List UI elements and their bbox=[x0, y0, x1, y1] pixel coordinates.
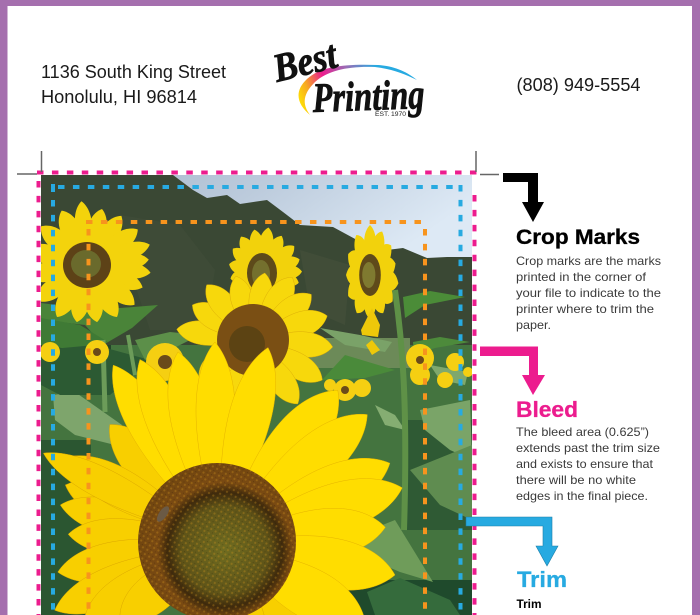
large sunflower disc bbox=[138, 463, 296, 615]
sunflower middle bbox=[175, 271, 334, 411]
stem left bbox=[103, 340, 105, 412]
bleed description: extends past the trim size bbox=[516, 441, 660, 455]
crop marks description: Crop marks are the marks bbox=[516, 254, 661, 268]
bleed line: pink dashed border bbox=[37, 172, 477, 615]
sky bbox=[173, 175, 472, 258]
address bbox=[41, 62, 226, 107]
large sunflower seed texture bbox=[138, 463, 296, 615]
large sunflower front petals bbox=[96, 342, 409, 615]
logo: Best Printing bbox=[267, 31, 425, 122]
leaves bbox=[41, 291, 472, 615]
safe area: orange dashed border bbox=[86, 222, 428, 615]
bleed description: The bleed area (0.625”) bbox=[516, 425, 649, 439]
trim subheading: Trim bbox=[516, 597, 542, 611]
stem right bbox=[395, 290, 405, 530]
arrow: crop marks bbox=[503, 173, 544, 222]
logo word Printing: Printing bbox=[311, 72, 425, 122]
bleed description: and exists to ensure that bbox=[516, 457, 654, 471]
bleed heading: Bleed bbox=[516, 397, 578, 422]
arrow: trim bbox=[466, 517, 558, 566]
arrow: bleed bbox=[480, 346, 545, 395]
sunflower top centre bbox=[229, 228, 302, 290]
sunflower top left bbox=[41, 201, 150, 322]
sunflower top right bbox=[345, 225, 399, 319]
logo swoosh bbox=[299, 65, 417, 115]
mountain bbox=[41, 175, 472, 345]
sunflower photo bbox=[24, 175, 473, 615]
bee bbox=[156, 506, 170, 522]
crop marks bbox=[17, 151, 499, 174]
trim heading: Trim bbox=[517, 567, 567, 592]
bleed description bbox=[516, 425, 660, 503]
foreground foliage base bbox=[41, 345, 472, 615]
address: 1136 South King Street bbox=[41, 62, 226, 82]
crop marks description: printed in the corner of bbox=[516, 270, 647, 284]
crop marks description: your file to indicate to the bbox=[516, 286, 661, 300]
bleed description: edges in the final piece. bbox=[516, 489, 648, 503]
bud below right flower bbox=[361, 308, 380, 355]
crop marks description bbox=[516, 254, 661, 332]
bleed description: there will be no white bbox=[516, 473, 636, 487]
crop marks description: paper. bbox=[516, 318, 551, 332]
large sunflower back petals bbox=[43, 424, 296, 615]
crop marks heading: Crop Marks bbox=[516, 226, 640, 249]
logo established date: EST. 1970 bbox=[375, 111, 406, 118]
logo word Best: Best bbox=[267, 31, 343, 91]
trim line: blue dashed border bbox=[53, 184, 460, 615]
address: Honolulu, HI 96814 bbox=[41, 87, 197, 107]
phone number: (808) 949-5554 bbox=[516, 75, 640, 95]
crop marks description: printer where to trim the bbox=[516, 302, 654, 316]
background small flowers bbox=[40, 340, 473, 401]
leaf under small flower left bbox=[41, 303, 158, 345]
large sunflower bbox=[36, 342, 409, 615]
